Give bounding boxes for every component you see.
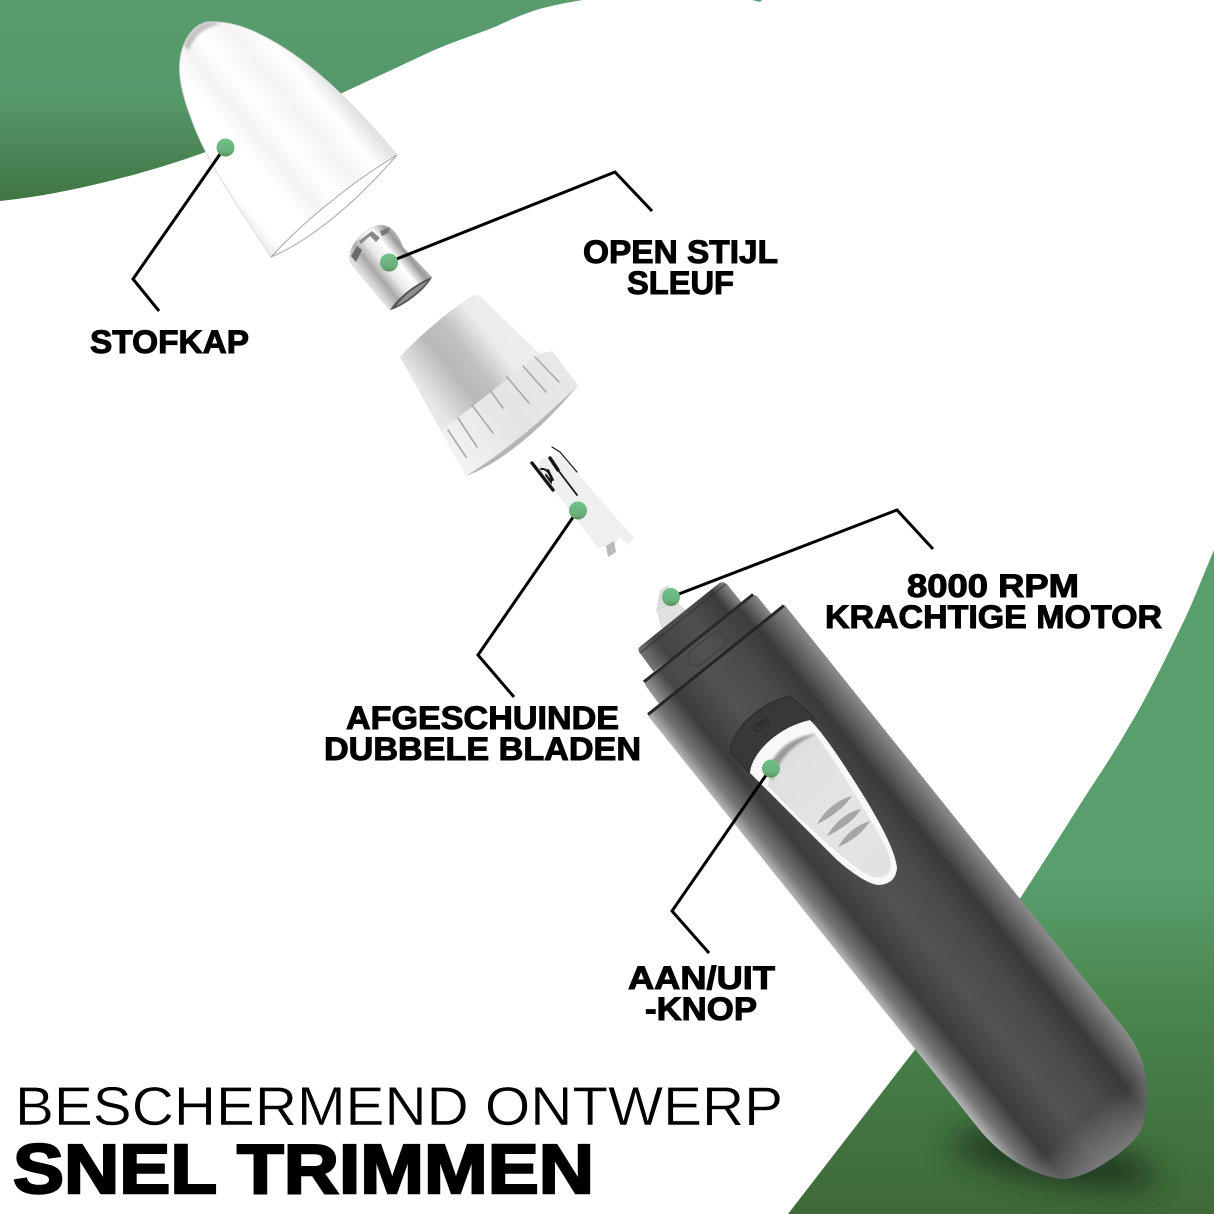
label: aan/uit-knop: AAN/UIT <box>628 960 776 996</box>
icon: silver blade guard <box>400 295 578 476</box>
label: 8000 rpm krachtige motor: KRACHTIGE MOTOR <box>825 599 1162 635</box>
icon: power switch: ON <box>750 714 773 736</box>
icon: dust cap <box>180 22 397 257</box>
leader line: stofkap <box>133 147 225 311</box>
marker dot: afgeschuinde dubbele bladen <box>569 502 587 520</box>
icon: open-style slot head <box>350 225 432 310</box>
heading: beschermend ontwerp: BESCHERMEND ONTWERP <box>15 1075 783 1137</box>
leader line: 8000 rpm motor <box>671 510 933 597</box>
marker dot: open stijl sleuf <box>380 254 398 272</box>
leader line: aan/uit-knop <box>672 768 771 953</box>
label: aan/uit-knop: -KNOP <box>645 991 757 1027</box>
label: open stijl sleuf <box>583 234 778 301</box>
icon: trimmer motor pin <box>656 585 690 628</box>
label: aan/uit-knop <box>628 960 776 1027</box>
marker dot: stofkap <box>216 138 234 156</box>
background: bottom-right green swoosh <box>788 550 1214 1214</box>
label: afgeschuinde dubbele bladen: DUBBELE BLADEN <box>324 731 641 767</box>
label: stofkap: STOFKAP <box>90 324 249 360</box>
label: open stijl sleuf: OPEN STIJL <box>583 234 778 270</box>
background: small green sliver at top edge <box>752 0 762 2</box>
leader line: open stijl sleuf <box>389 172 652 262</box>
heading: snel trimmen: SNEL TRIMMEN <box>13 1130 594 1208</box>
background: top-left green swoosh <box>0 0 583 201</box>
label: 8000 rpm krachtige motor: 8000 RPM <box>907 568 1079 604</box>
label: 8000 rpm krachtige motor <box>825 568 1162 635</box>
leader line: afgeschuinde dubbele bladen <box>478 510 578 697</box>
icon: double blades <box>532 447 635 557</box>
icon: power switch <box>730 696 897 885</box>
marker dot: motor <box>662 588 680 606</box>
label: open stijl sleuf: SLEUF <box>627 265 734 301</box>
label: afgeschuinde dubbele bladen <box>324 700 641 767</box>
marker dot: aan/uit-knop <box>762 760 780 778</box>
icon: trimmer body <box>611 560 1183 1212</box>
label: afgeschuinde dubbele bladen: AFGESCHUINDE <box>346 700 619 736</box>
